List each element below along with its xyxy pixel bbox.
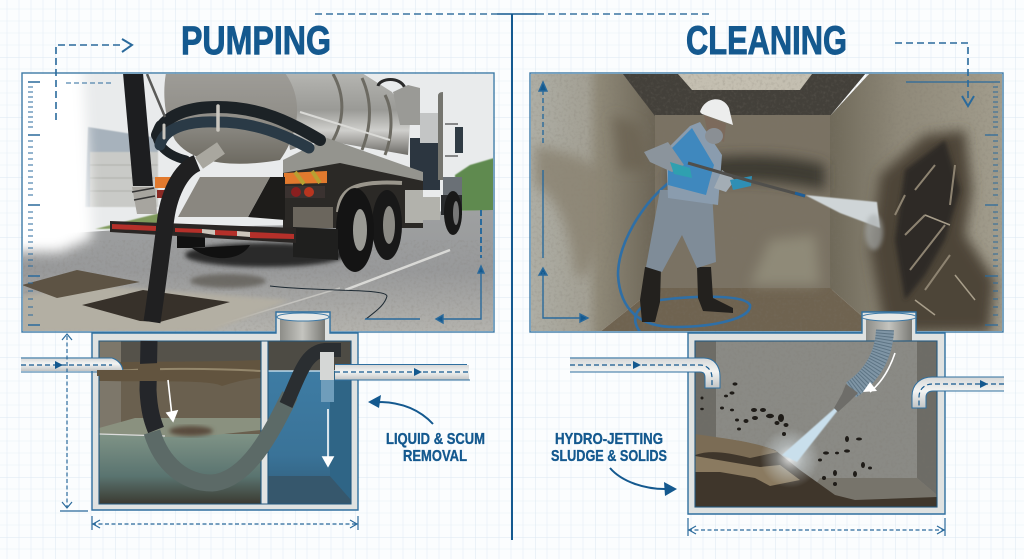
- arrow: to sludge: [610, 468, 677, 496]
- arrow: lower right of photo: [365, 210, 484, 323]
- skylight: [678, 74, 812, 90]
- arrows: left of cleaning photo: [539, 82, 588, 322]
- riser: [277, 313, 329, 342]
- panel: cleaning photo: [530, 73, 1003, 332]
- dimension: cleaning width: [688, 518, 945, 536]
- nozzle: [834, 384, 858, 412]
- photo frame: pumping: [22, 73, 494, 332]
- sky: [82, 74, 493, 232]
- heading: pumping: PUMPING: [181, 19, 331, 63]
- fuel tanks: [405, 190, 440, 223]
- arrow: top right dashed elbow: [895, 43, 974, 106]
- chamber outline: [695, 341, 937, 507]
- inlet pipe: pumping: [21, 358, 140, 373]
- center divider with top dashed rule: [315, 14, 710, 540]
- grass: [95, 213, 160, 229]
- wand: [688, 163, 805, 196]
- tank walls: [92, 312, 358, 510]
- upper hose: [148, 341, 156, 430]
- rear plate and bumper: [110, 177, 296, 258]
- floor: [600, 288, 880, 332]
- right chamber: [268, 341, 351, 504]
- chassis underside: [283, 162, 423, 228]
- ceiling: [622, 73, 866, 116]
- dimension: pumping width: [92, 516, 358, 530]
- spray jet: [782, 408, 838, 462]
- scum overlap: [138, 363, 160, 381]
- trees: [455, 158, 494, 211]
- main suction hose entering manhole: [152, 148, 221, 322]
- left wall: [530, 73, 655, 332]
- truck road shadow: [185, 243, 345, 267]
- upper coiled hoses: [157, 106, 320, 160]
- boots: [640, 267, 733, 322]
- worker: [618, 99, 805, 332]
- ruler: right: [906, 82, 1000, 325]
- water: [99, 434, 261, 504]
- tank side: [280, 73, 420, 155]
- label: hydro-jetting sludge and solids: HYDRO-JETTING: [555, 431, 663, 448]
- debris: [700, 382, 872, 486]
- water spray on wall: [805, 195, 883, 250]
- ruler: left: [28, 82, 40, 325]
- road lines and stains: [190, 250, 450, 326]
- helmet: [700, 99, 733, 125]
- truck frame: [155, 138, 423, 228]
- inlet pipe: cleaning: [570, 358, 720, 388]
- right wall: [830, 73, 1003, 332]
- scum layer: [99, 360, 261, 386]
- left white fade: [10, 60, 92, 252]
- diagram: pumping tank cross-section: [92, 312, 358, 510]
- outlet pipe: pumping: [335, 364, 470, 380]
- photo frame: cleaning: [530, 73, 1003, 332]
- riser: [862, 313, 916, 342]
- tank rear bowl: [164, 73, 297, 164]
- label: hydro-jetting sludge and solids: [551, 431, 667, 465]
- building: [85, 127, 158, 207]
- label: liquid and scum removal: [386, 431, 485, 465]
- label: hydro-jetting sludge and solids: SLUDGE & SOLIDS: [551, 448, 667, 465]
- white flow arrows: pumping: [167, 380, 333, 466]
- manhole opening: [82, 290, 230, 322]
- face and respirator: [704, 115, 726, 142]
- chamber outlines: [99, 341, 351, 504]
- spray glow: [760, 428, 820, 488]
- foam layer: [99, 418, 261, 437]
- sludge layers: [695, 438, 937, 507]
- outlet pipe: cleaning: [912, 377, 1004, 408]
- arrow: top left dashed elbow: [56, 39, 132, 120]
- wheels: [293, 188, 462, 272]
- manhole cover: [22, 270, 140, 298]
- concrete around manhole: [22, 285, 290, 332]
- wall grime: [535, 115, 825, 285]
- blue hose: [618, 180, 750, 332]
- diagram: cleaning tank cross-section: [688, 312, 945, 514]
- sludge on right wall: [870, 130, 995, 332]
- tank interior: [695, 341, 937, 507]
- cab: [410, 92, 463, 215]
- heading: cleaning: CLEANING: [686, 19, 847, 63]
- back wall: [655, 115, 832, 290]
- dimension: height: [60, 334, 88, 511]
- vertical suction hose and coupling: [123, 73, 165, 214]
- arrow: to liquid and scum label: [368, 395, 433, 424]
- panel: pumping photo: [10, 60, 494, 332]
- torso: [666, 122, 722, 205]
- outlet tee baffle: [320, 352, 334, 402]
- submerged hose: [152, 395, 290, 483]
- arms: [644, 142, 684, 172]
- road: [22, 210, 494, 332]
- inner dashed rule: [66, 82, 111, 84]
- jetting hose: [851, 330, 885, 390]
- tank walls: [688, 312, 945, 514]
- label: liquid and scum removal: LIQUID & SCUM: [386, 431, 485, 448]
- partition: [261, 341, 268, 504]
- legs: [646, 190, 716, 272]
- left chamber: [99, 341, 261, 504]
- white flow arrow: cleaning: [863, 353, 895, 392]
- label: liquid and scum removal: REMOVAL: [403, 448, 467, 465]
- gloves: [670, 162, 692, 178]
